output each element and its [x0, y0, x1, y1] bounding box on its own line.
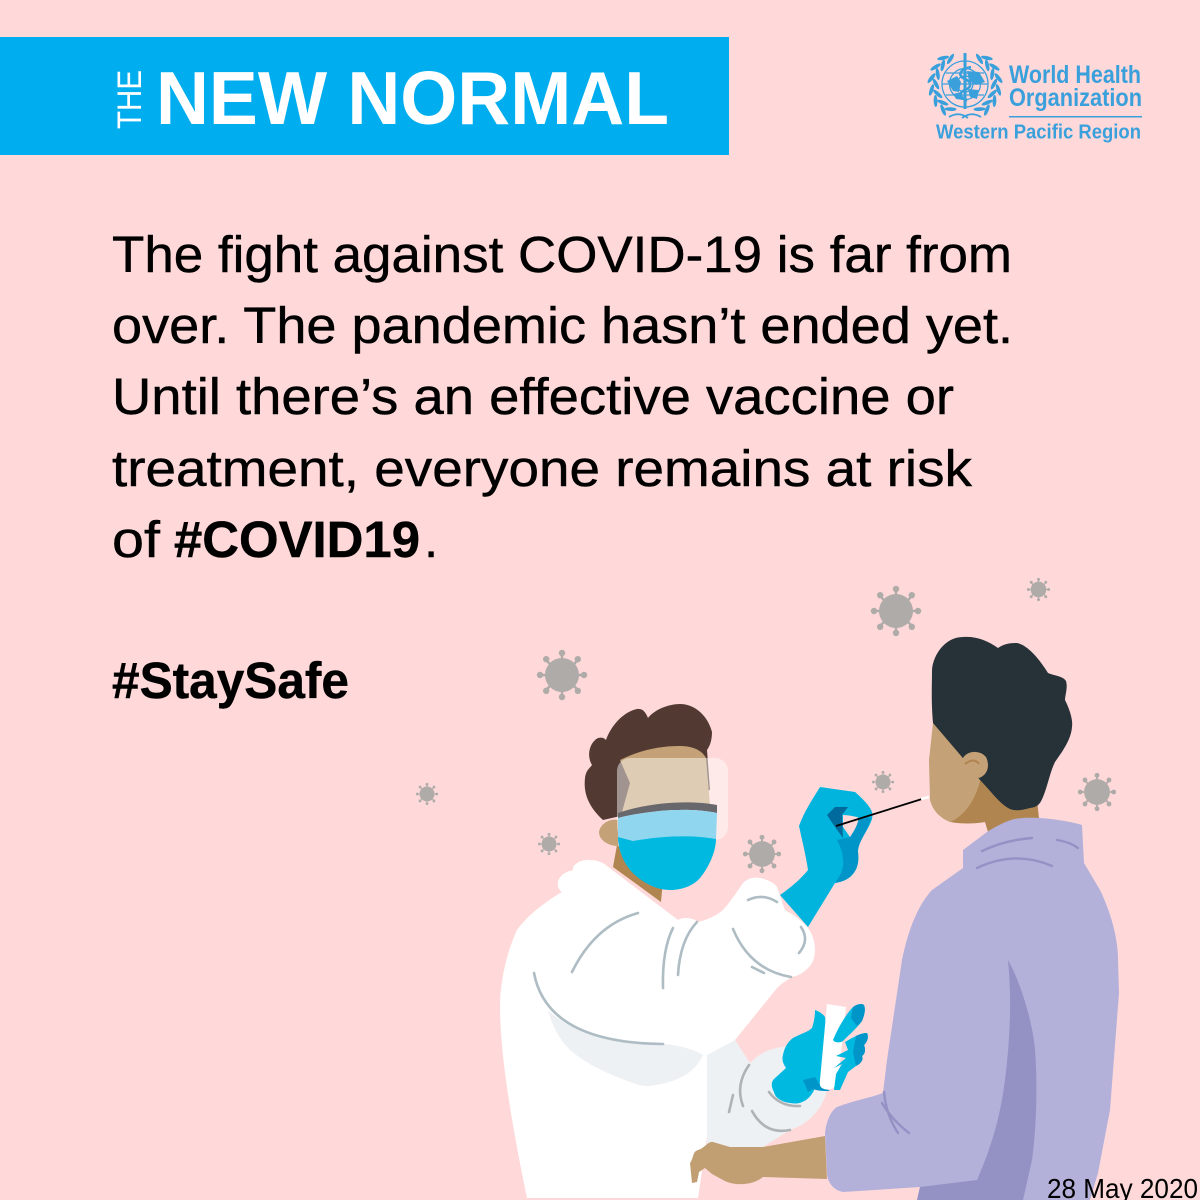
lower glove [772, 1010, 835, 1104]
main message text: treatment, everyone remains at risk [112, 440, 973, 497]
suit creases [534, 897, 805, 1044]
glove shade [835, 816, 871, 883]
goggle strap [618, 802, 717, 818]
face [929, 723, 980, 822]
suit shadow [548, 1010, 703, 1086]
mask upper band [618, 810, 717, 841]
mask [618, 836, 716, 890]
logo text: World Health: World Health [1009, 61, 1141, 89]
banner title: NEW NORMAL: NEW NORMAL [156, 56, 669, 140]
sweater shade [917, 960, 1036, 1200]
protective suit [500, 860, 815, 1198]
face [620, 746, 710, 812]
sweater [825, 818, 1119, 1200]
sweater creases [882, 838, 1078, 1133]
main message text: Until there’s an effective vaccine or [112, 368, 954, 425]
hair [932, 637, 1072, 810]
illustration: patient [690, 637, 1119, 1200]
main message text [112, 226, 1013, 568]
glove shade [803, 1077, 830, 1092]
arm glove [780, 787, 872, 927]
main message text: The fight against COVID-19 is far from [112, 226, 1012, 283]
main message text: of [112, 511, 161, 568]
header banner [0, 37, 729, 155]
glove inner fold [827, 807, 848, 838]
logo text: Organization: Organization [1009, 84, 1142, 112]
hair [585, 704, 712, 820]
icon: WHO emblem [926, 53, 1004, 118]
banner small word: THE: THE [111, 70, 149, 129]
visor shield [617, 758, 728, 840]
virus particles [416, 578, 1116, 873]
neck and jaw shade [950, 780, 1039, 832]
swab [836, 799, 922, 826]
logo text: Western Pacific Region: Western Pacific Region [936, 120, 1141, 144]
WHO logo [926, 53, 1142, 144]
neck [613, 845, 663, 902]
main message text: #COVID19 [174, 511, 420, 568]
main message text: over. The pandemic hasn’t ended yet. [112, 297, 1013, 354]
glove fingers [833, 1004, 868, 1090]
illustration: health worker [500, 704, 872, 1198]
patient arm [690, 1136, 827, 1184]
ear [963, 752, 988, 778]
hashtag: StaySafe: #StaySafe [112, 652, 349, 709]
ear [599, 820, 618, 846]
test tube [820, 1004, 846, 1090]
lower sleeve [707, 1040, 826, 1147]
main message text: . [424, 511, 438, 568]
